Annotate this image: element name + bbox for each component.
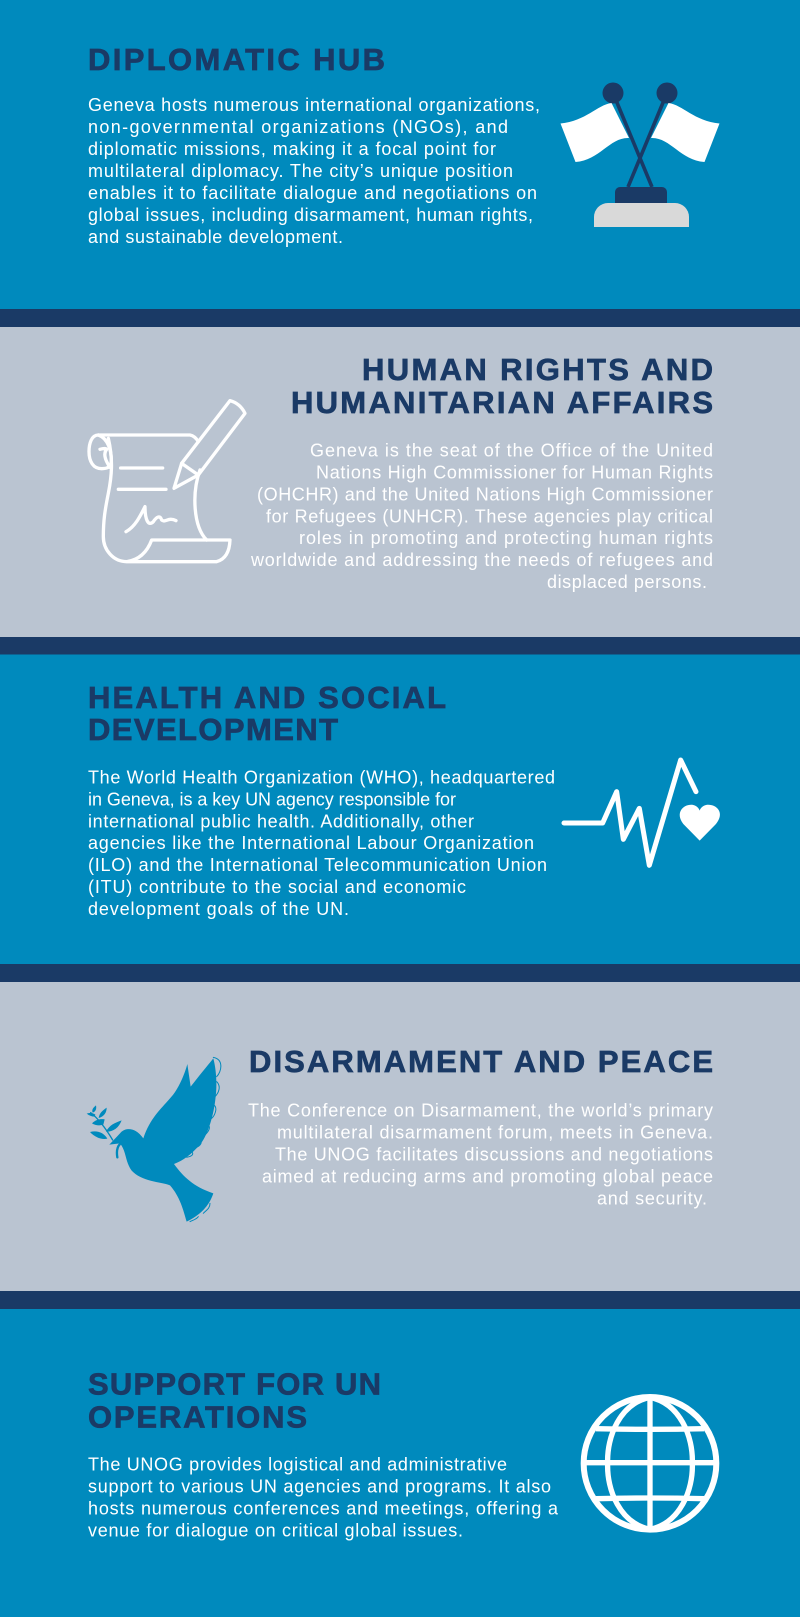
text block: disarmament description: aimed at reducing arms and promoting global peace — [262, 1166, 713, 1186]
text block: human rights description: Nations High Commissioner for Human Rights — [316, 462, 713, 482]
panel: disarmament and peace — [0, 982, 800, 1291]
panel: support for un operations — [0, 1309, 800, 1617]
text block: health description: agencies like the International Labour Organization — [88, 833, 534, 853]
text block: health description: (ITU) contribute to the social and economic — [88, 877, 466, 897]
text block: diplomatic hub description: global issues, including disarmament, human rights, — [88, 205, 533, 225]
text block: health description: development goals of the UN. — [88, 899, 349, 919]
text block: human rights description: displaced persons. — [547, 572, 707, 592]
panel: diplomatic hub — [0, 0, 800, 309]
text block: health description — [88, 768, 555, 919]
text block: support description: venue for dialogue on critical global issues. — [88, 1520, 463, 1540]
text block: diplomatic hub description: enables it to facilitate dialogue and negotiations on — [88, 183, 537, 203]
icon: scroll and pen — [89, 401, 245, 562]
text block: diplomatic hub description: multilateral diplomacy. The city’s unique position — [88, 161, 513, 181]
heading: human rights and humanitarian affairs — [291, 352, 713, 420]
panel: health and social development — [0, 654, 800, 964]
heading: support for un operations: SUPPORT FOR UN — [88, 1366, 381, 1402]
text block: support description: The UNOG provides logistical and administrative — [88, 1454, 507, 1474]
icon: globe — [584, 1397, 716, 1530]
heading: diplomatic hub: DIPLOMATIC HUB — [88, 42, 385, 77]
text block: disarmament description: The UNOG facilitates discussions and negotiations — [275, 1144, 713, 1164]
text block: human rights description: Geneva is the seat of the Office of the United — [310, 440, 713, 460]
text block: support description: hosts numerous conferences and meetings, offering a — [88, 1498, 559, 1518]
heading: support for un operations — [88, 1366, 381, 1434]
text block: diplomatic hub description: non-governmental organizations (NGOs), and — [88, 117, 508, 137]
text block: human rights description: for Refugees (UNHCR). These agencies play critical — [266, 506, 713, 526]
text block: health description: in Geneva, is a key UN agency responsible for — [88, 790, 456, 810]
icon: crossed flags — [560, 82, 720, 227]
text block: health description: The World Health Organization (WHO), headquartered — [88, 768, 555, 788]
text block: health description: (ILO) and the International Telecommunication Union — [88, 855, 547, 875]
text block: human rights description: worldwide and addressing the needs of refugees and — [250, 550, 713, 570]
icon: dove with olive branch — [87, 1057, 221, 1222]
text block: human rights description: roles in promoting and protecting human rights — [299, 528, 713, 548]
text block: disarmament description: The Conference on Disarmament, the world’s primary — [248, 1100, 713, 1120]
panel: human rights and humanitarian affairs — [0, 327, 800, 637]
text block: human rights description: (OHCHR) and the United Nations High Commissioner — [257, 484, 713, 504]
heading: human rights and humanitarian affairs: HUMANITARIAN AFFAIRS — [291, 385, 713, 420]
text block: support description — [88, 1454, 559, 1540]
heading: health and social development: HEALTH AND SOCIAL — [88, 680, 446, 715]
heading: disarmament and peace: DISARMAMENT AND PEACE — [249, 1044, 713, 1079]
heading: support for un operations: OPERATIONS — [88, 1400, 307, 1434]
text block: support description: support to various UN agencies and programs. It also — [88, 1476, 551, 1496]
text block: disarmament description: multilateral disarmament forum, meets in Geneva. — [277, 1122, 713, 1142]
icon: heartbeat and heart — [564, 760, 720, 865]
text block: disarmament description — [248, 1100, 713, 1208]
text block: disarmament description: and security. — [597, 1188, 707, 1208]
text block: diplomatic hub description — [88, 95, 540, 247]
text block: diplomatic hub description: and sustainable development. — [88, 227, 343, 247]
heading: health and social development — [88, 680, 446, 747]
text block: diplomatic hub description: Geneva hosts numerous international organizations, — [88, 95, 540, 115]
heading: human rights and humanitarian affairs: HUMAN RIGHTS AND — [362, 352, 713, 387]
text block: human rights description — [250, 440, 713, 592]
text block: diplomatic hub description: diplomatic missions, making it a focal point for — [88, 139, 496, 159]
text block: health description: international public health. Additionally, other — [88, 812, 474, 832]
heading: health and social development: DEVELOPMENT — [88, 712, 338, 747]
